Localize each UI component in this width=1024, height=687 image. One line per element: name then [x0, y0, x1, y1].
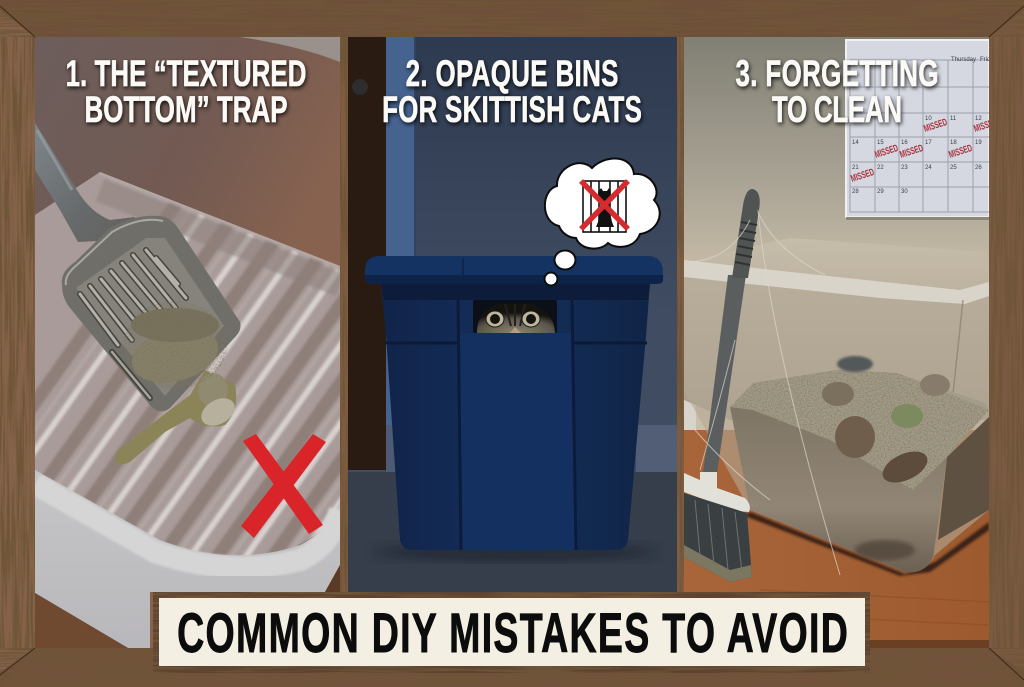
bin front face: [691, 403, 989, 572]
bin rim: [684, 260, 989, 304]
heading: panel 2: [383, 59, 644, 128]
soiled litter inside bin: [730, 356, 989, 572]
wall calendar: MISSED: [973, 117, 999, 135]
wall calendar: Thursday: [951, 57, 976, 63]
wall calendar: 10: [925, 116, 932, 122]
icon: red cross: [581, 181, 628, 229]
wall calendar: 15: [877, 140, 884, 146]
wood table corner: [35, 593, 128, 648]
wood floor: [684, 380, 989, 648]
wall calendar: MISSED: [874, 143, 900, 161]
heading: panel 3: 3. FORGETTING: [736, 52, 938, 94]
wooden dividers: [340, 37, 684, 597]
wall calendar: 29: [877, 189, 884, 195]
wall calendar: 11: [950, 116, 957, 122]
litter tray with ridges: [35, 172, 340, 648]
wall calendar: 24: [925, 165, 932, 171]
wall calendar: MISSED: [899, 143, 925, 161]
wall calendar: 25: [950, 165, 957, 171]
wall calendar: MISSED: [850, 167, 876, 185]
wall calendar: 16: [901, 140, 908, 146]
litter clumps: [115, 301, 240, 464]
title banner: COMMON DIY MISTAKES TO AVOID: [177, 603, 848, 665]
wall calendar: 21: [852, 165, 859, 171]
heading: panel 1: [66, 59, 310, 127]
heading: panel 2: 2. OPAQUE BINS: [406, 52, 618, 94]
wall calendar: 22: [877, 165, 884, 171]
wall calendar: 17: [925, 140, 932, 146]
bin back wall: [684, 238, 989, 420]
heading: panel 3: [736, 52, 938, 130]
wall calendar: 23: [901, 165, 908, 171]
wall calendar: 18: [950, 140, 957, 146]
panel: textured bottom trap: [35, 37, 340, 648]
wall calendar: [846, 40, 999, 220]
wall calendar: 12: [975, 116, 982, 122]
heading: panel 1: 1. THE “TEXTURED: [66, 52, 306, 94]
cat peeking through handle: [473, 300, 557, 333]
wall calendar: 30: [901, 189, 908, 195]
dirty clear bin: [684, 238, 989, 576]
heading: panel 1: BOTTOM” TRAP: [85, 88, 287, 130]
wall calendar: 26: [975, 165, 982, 171]
heading: panel 3: TO CLEAN: [772, 88, 902, 130]
wall calendar: 19: [975, 140, 982, 146]
broom with cobwebs: [684, 189, 840, 582]
icon: cage with cat: [583, 181, 626, 232]
tray rim: [35, 484, 340, 567]
red X mark: [241, 434, 326, 538]
panel: opaque bins: [348, 37, 677, 597]
wall calendar: Friday: [980, 57, 997, 63]
panel: forgetting to clean: [684, 37, 999, 648]
heading: panel 2: FOR SKITTISH CATS: [382, 88, 642, 130]
wall calendar: 28: [852, 189, 859, 195]
wall calendar: 14: [852, 140, 859, 146]
tray front wall: [35, 470, 340, 648]
thought bubble with crossed-out cage: [544, 158, 660, 286]
wall calendar: MISSED: [923, 117, 949, 135]
metal scoop: [35, 123, 240, 411]
navy storage bin: [365, 256, 663, 550]
wall calendar: MISSED: [948, 143, 974, 161]
